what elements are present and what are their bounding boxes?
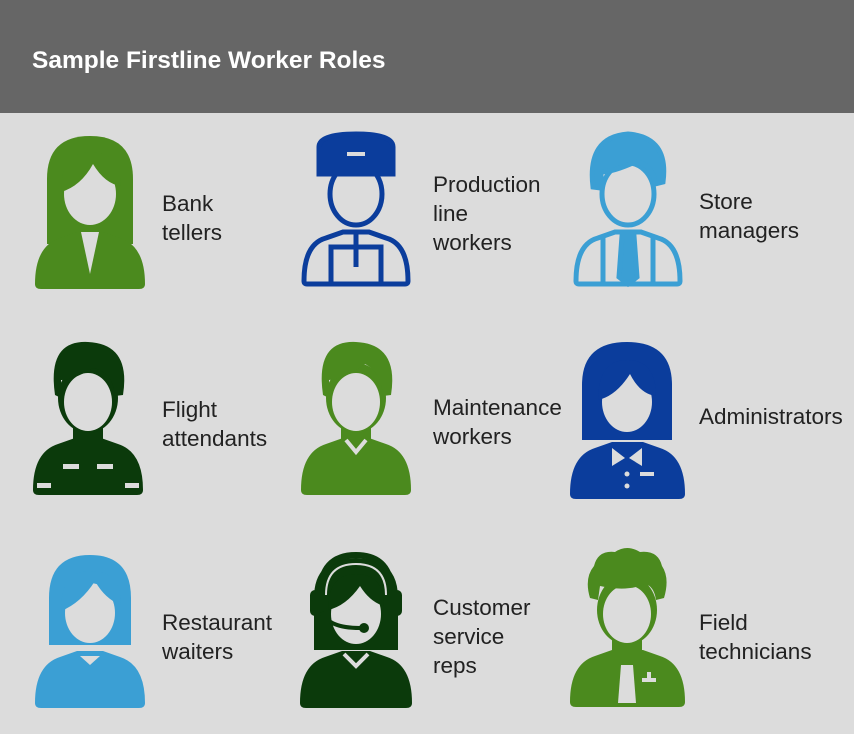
label: maintenance workers bbox=[433, 395, 562, 449]
icon: restaurant waiter bbox=[35, 555, 145, 708]
label: bank tellers bbox=[162, 191, 222, 245]
label: restaurant waiters: waiters bbox=[162, 639, 233, 664]
label: production line workers: workers bbox=[433, 230, 512, 255]
label: bank tellers: tellers bbox=[162, 220, 222, 245]
icon: flight attendant bbox=[33, 342, 143, 495]
icon: store manager bbox=[576, 134, 680, 284]
label: maintenance workers: Maintenance bbox=[433, 395, 562, 420]
label: flight attendants bbox=[162, 397, 267, 451]
label: administrators: Administrators bbox=[699, 404, 843, 429]
label: field technicians bbox=[699, 610, 812, 664]
label: store managers: Store bbox=[699, 189, 753, 214]
label: flight attendants: Flight bbox=[162, 397, 217, 422]
label: store managers bbox=[699, 189, 799, 243]
label: customer service reps: reps bbox=[433, 653, 477, 678]
label: maintenance workers: workers bbox=[433, 424, 512, 449]
title: Sample Firstline Worker Roles bbox=[32, 47, 386, 74]
label: customer service reps: service bbox=[433, 624, 504, 649]
label: customer service reps bbox=[433, 595, 531, 678]
label: restaurant waiters bbox=[162, 610, 272, 664]
label: flight attendants: attendants bbox=[162, 426, 267, 451]
header bbox=[0, 0, 854, 113]
label: bank tellers: Bank bbox=[162, 191, 213, 216]
label: field technicians: technicians bbox=[699, 639, 812, 664]
label: field technicians: Field bbox=[699, 610, 748, 635]
label: production line workers: line bbox=[433, 201, 468, 226]
icon: administrator bbox=[570, 342, 685, 499]
icon: production worker bbox=[304, 134, 408, 284]
icon: customer service rep bbox=[300, 555, 412, 708]
icon: maintenance worker bbox=[301, 342, 411, 495]
label: production line workers bbox=[433, 172, 541, 255]
label: restaurant waiters: Restaurant bbox=[162, 610, 272, 635]
icon: field technician bbox=[570, 548, 685, 707]
label: customer service reps: Customer bbox=[433, 595, 531, 620]
icon: bank teller bbox=[35, 136, 145, 289]
label: production line workers: Production bbox=[433, 172, 541, 197]
label: store managers: managers bbox=[699, 218, 799, 243]
